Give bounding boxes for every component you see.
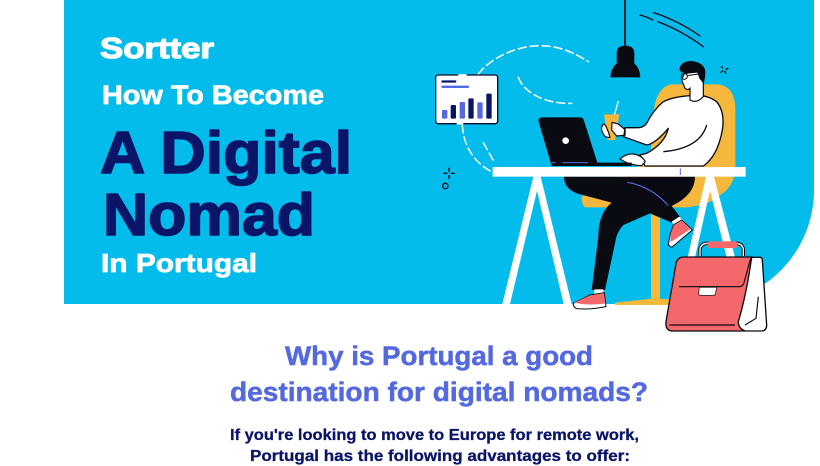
briefcase (666, 241, 767, 331)
table top (493, 167, 746, 177)
person (564, 61, 723, 309)
motion lines (640, 13, 703, 47)
title: In Portugal (101, 248, 257, 278)
heading (230, 341, 648, 407)
heading: Why is Portugal a good (285, 341, 593, 371)
intro text (230, 427, 639, 465)
desk (502, 177, 735, 304)
illustration: digital nomad at desk (436, 0, 767, 331)
trousers (564, 177, 695, 290)
title: Nomad (103, 182, 315, 248)
panel: blue hero background (64, 0, 814, 304)
hands (601, 122, 645, 166)
hair (679, 61, 705, 83)
dashed flight paths (462, 46, 588, 172)
icon: sparkles (443, 66, 728, 189)
intro text: Portugal has the following advantages to offer: (250, 448, 630, 465)
sweater (623, 96, 723, 166)
socks (594, 217, 683, 294)
sneakers (573, 293, 606, 309)
title: A Digital (100, 120, 352, 186)
chair (582, 84, 735, 305)
chart card (436, 75, 498, 124)
heading: destination for digital nomads? (230, 377, 648, 407)
brand logo: Sortter: Sortter (100, 33, 214, 65)
intro text: If you're looking to move to Europe for remote work, (230, 427, 639, 444)
drink (604, 101, 619, 140)
head and neck (682, 71, 703, 101)
title: How To Become (102, 80, 324, 110)
glasses (681, 73, 699, 79)
laptop (538, 117, 632, 166)
icon: hanging lamp (610, 0, 640, 77)
title (100, 80, 352, 278)
